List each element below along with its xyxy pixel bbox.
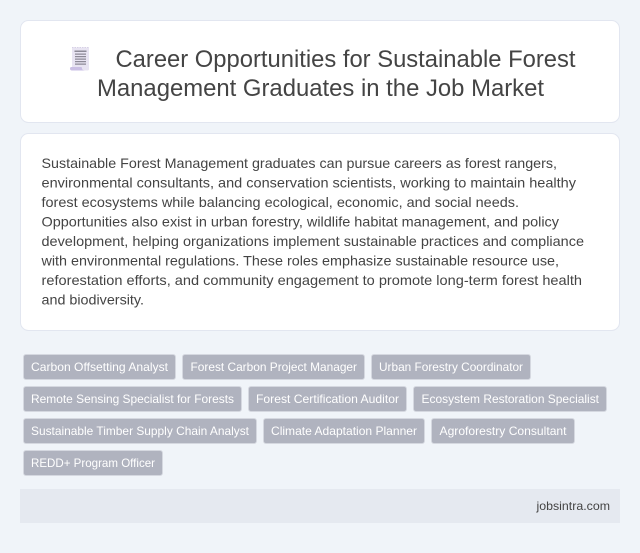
tag: Carbon Offsetting Analyst xyxy=(24,354,176,380)
tag: Agroforestry Consultant: Agroforestry Consultant xyxy=(440,424,567,438)
icon: paper scroll xyxy=(70,48,89,70)
tag: Remote Sensing Specialist for Forests xyxy=(24,386,242,412)
tag: Climate Adaptation Planner: Climate Adaptation Planner xyxy=(271,424,417,438)
tag: Carbon Offsetting Analyst: Carbon Offsetting Analyst xyxy=(31,360,169,374)
description text: with environmental regulations. These roles emphasize sustainable resource use, xyxy=(40,252,559,268)
tag: REDD+ Program Officer xyxy=(24,450,162,476)
description text: environmental consultants, and conservation scientists, working to maintain healthy xyxy=(42,174,576,190)
tag: Forest Carbon Project Manager xyxy=(182,354,364,380)
tag list: career roles xyxy=(24,354,606,476)
tag: Sustainable Timber Supply Chain Analyst xyxy=(24,418,256,444)
tag: Forest Certification Auditor: Forest Certification Auditor xyxy=(256,392,399,406)
tag: REDD+ Program Officer: REDD+ Program Officer xyxy=(31,456,155,470)
title text: Career Opportunities for Sustainable Forest xyxy=(116,46,576,73)
tag: Forest Carbon Project Manager: Forest Carbon Project Manager xyxy=(190,360,357,374)
description text: and biodiversity. xyxy=(42,292,144,308)
panel: title card xyxy=(20,20,620,122)
tag: Ecosystem Restoration Specialist xyxy=(414,386,606,412)
description text: reforestation efforts, and community engagement to promote long-term forest health xyxy=(42,272,582,288)
tag: Urban Forestry Coordinator: Urban Forestry Coordinator xyxy=(379,360,523,374)
footer bar xyxy=(20,489,620,523)
tag: Remote Sensing Specialist for Forests: Remote Sensing Specialist for Forests xyxy=(31,392,234,406)
tag: Forest Certification Auditor xyxy=(248,386,406,412)
title text xyxy=(97,46,576,102)
description text: Opportunities also exist in urban forestry, wildlife habitat management, and policy xyxy=(42,214,559,230)
description text: forest ecosystems while balancing ecological, economic, and social needs. xyxy=(42,194,519,210)
description text: Sustainable Forest Management graduates can pursue careers as forest rangers, xyxy=(42,155,557,171)
tag: Ecosystem Restoration Specialist: Ecosystem Restoration Specialist xyxy=(422,392,600,406)
tag: Urban Forestry Coordinator xyxy=(372,354,530,380)
title text: Management Graduates in the Job Market xyxy=(97,75,544,102)
tag: Climate Adaptation Planner xyxy=(264,418,424,444)
tag: Agroforestry Consultant xyxy=(432,418,574,444)
panel: description card xyxy=(20,134,620,330)
tag: Sustainable Timber Supply Chain Analyst: Sustainable Timber Supply Chain Analyst xyxy=(31,424,250,438)
description text xyxy=(40,155,584,308)
description text: development, helping organizations implement sustainable practices and compliance xyxy=(42,233,584,249)
footer source text: jobsintra.com xyxy=(535,499,610,513)
